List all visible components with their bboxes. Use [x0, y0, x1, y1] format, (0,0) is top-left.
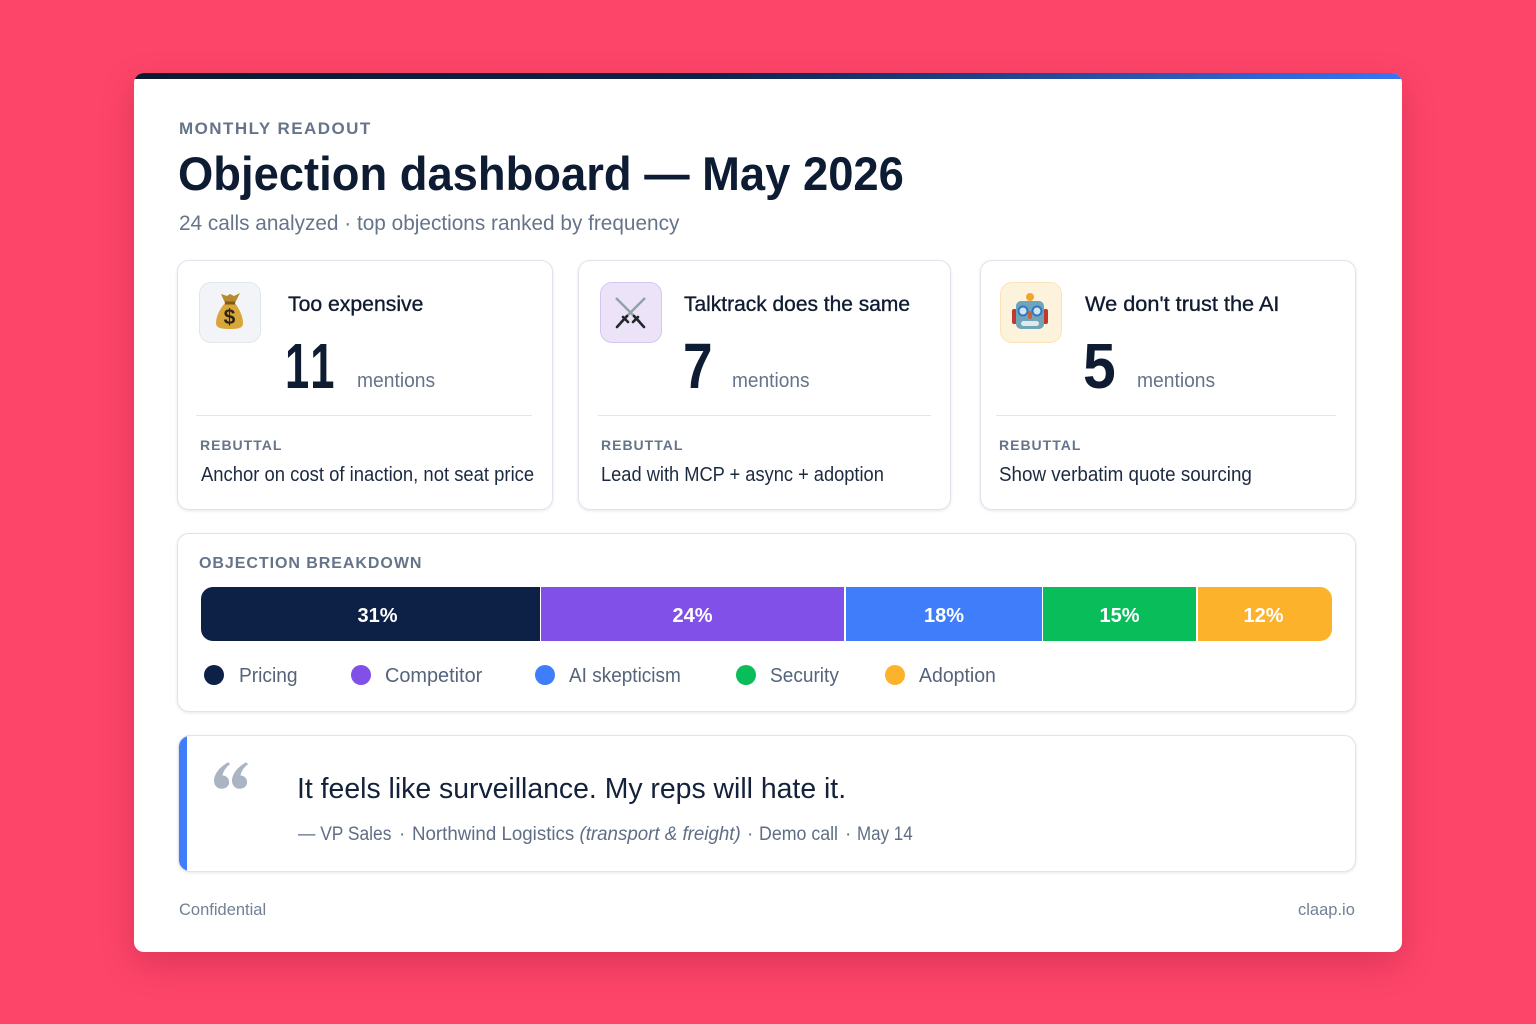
- label: rebuttal: REBUTTAL: [601, 437, 683, 453]
- number: 11: 11: [285, 330, 338, 402]
- footer: confidential: Confidential: [179, 901, 266, 919]
- title: Objection dashboard — May 2026: [178, 147, 904, 200]
- segment: competitor: [541, 587, 844, 641]
- heading: trust: We don't trust the AI: [1085, 292, 1279, 316]
- panel: too expensive: [177, 260, 553, 510]
- label: rebuttal: REBUTTAL: [999, 437, 1081, 453]
- legend: security: [736, 664, 839, 687]
- number: 5: 5: [1083, 330, 1116, 402]
- subtitle: 24 calls analyzed · top objections ranked by frequency: [179, 212, 679, 235]
- rebuttal text: Lead with MCP + async + adoption: [601, 464, 884, 486]
- quote attribution: [298, 824, 913, 845]
- segment: competitor: 24%: [672, 605, 713, 627]
- icon: money bag: $: [224, 306, 236, 329]
- panel: trust: [980, 260, 1356, 510]
- segment: pricing: 31%: [357, 605, 398, 627]
- segment: ai skepticism: [846, 587, 1042, 641]
- quote attribution: ·: [845, 824, 851, 845]
- quote attribution: May 14: [857, 824, 913, 845]
- heading: objection breakdown: OBJECTION BREAKDOWN: [199, 555, 422, 572]
- heading: too expensive: Too expensive: [288, 292, 423, 316]
- legend: [204, 664, 996, 687]
- dashboard panel: [134, 73, 1402, 952]
- legend: security: Security: [770, 664, 839, 687]
- segment: security: [1043, 587, 1196, 641]
- quote attribution: ·: [399, 824, 405, 845]
- legend: adoption: [885, 664, 996, 687]
- legend: adoption: Adoption: [919, 664, 996, 687]
- eyebrow label: MONTHLY READOUT: [179, 119, 372, 138]
- number: 7: 7: [683, 330, 713, 402]
- rebuttal text: Anchor on cost of inaction, not seat price: [201, 464, 534, 486]
- legend: ai skepticism: AI skepticism: [569, 664, 681, 687]
- quote attribution: Northwind Logistics (transport & freight): [412, 824, 741, 845]
- icon: quote mark: [214, 762, 248, 789]
- legend: pricing: [204, 664, 298, 687]
- panel: quote: [178, 735, 1356, 872]
- segment: ai skepticism: 18%: [924, 605, 964, 627]
- top gradient bar: [134, 73, 1402, 79]
- icon: crossed swords: [600, 282, 662, 343]
- quote attribution: ·: [747, 824, 753, 845]
- panel: talktrack: [578, 260, 951, 510]
- segment: adoption: 12%: [1243, 605, 1284, 627]
- segment: pricing: [201, 587, 540, 641]
- quote text: It feels like surveillance. My reps will hate it.: [297, 773, 846, 805]
- quote attribution: — VP Sales: [298, 824, 391, 845]
- segment: security: 15%: [1099, 605, 1140, 627]
- label: mentions: mentions: [357, 370, 435, 392]
- rebuttal text: Show verbatim quote sourcing: [999, 464, 1252, 486]
- footer: brand: claap.io: [1298, 901, 1355, 919]
- panel: objection breakdown: [177, 533, 1356, 712]
- label: rebuttal: REBUTTAL: [200, 437, 282, 453]
- quote attribution: Demo call: [759, 824, 838, 845]
- icon: money bag: [199, 282, 261, 343]
- stacked bar: [201, 587, 1332, 641]
- label: mentions: mentions: [1137, 370, 1215, 392]
- legend: pricing: Pricing: [239, 664, 298, 687]
- icon: robot: [1000, 282, 1062, 343]
- legend: competitor: Competitor: [385, 664, 482, 687]
- heading: talktrack: Talktrack does the same: [684, 292, 910, 316]
- segment: adoption: [1198, 587, 1332, 641]
- label: mentions: mentions: [732, 370, 810, 392]
